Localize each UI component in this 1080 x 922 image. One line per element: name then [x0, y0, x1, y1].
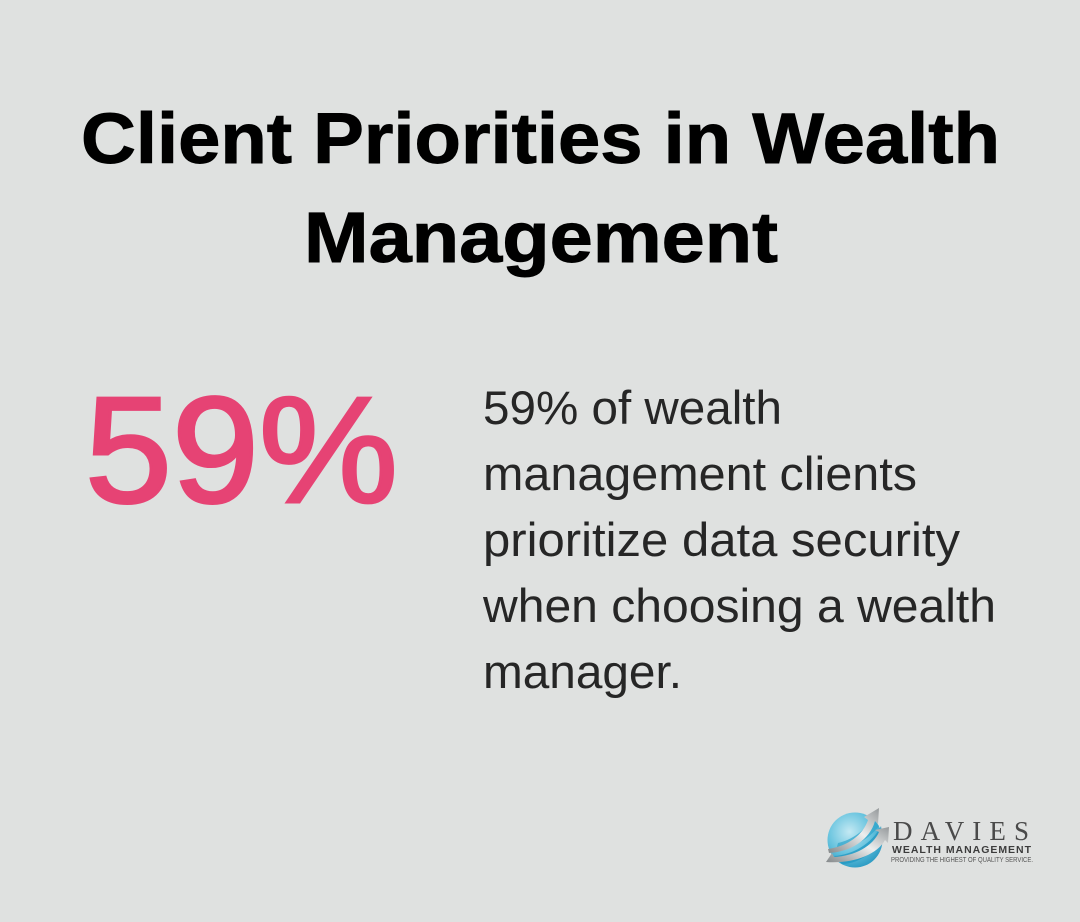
logo subtitle: WEALTH MANAGEMENT: [892, 844, 1032, 856]
statistic description: 59% of wealth: [483, 381, 782, 434]
title: Client Priorities in Wealth: [81, 100, 1000, 179]
statistic description: manager.: [483, 645, 682, 698]
logo wordmark: DAVIES: [893, 816, 1029, 846]
logo tagline: PROVIDING THE HIGHEST OF QUALITY SERVICE.: [891, 857, 1033, 864]
icon: globe with arrows: [826, 808, 889, 868]
logo: Davies Wealth Management: [826, 808, 1033, 868]
big statistic: 59%: 59%: [85, 365, 398, 534]
statistic description: prioritize data security: [483, 513, 961, 566]
title: [81, 100, 1000, 278]
statistic description: management clients: [483, 447, 917, 500]
statistic description: [482, 381, 996, 698]
statistic description: when choosing a wealth: [482, 579, 996, 632]
title: Management: [304, 199, 778, 278]
